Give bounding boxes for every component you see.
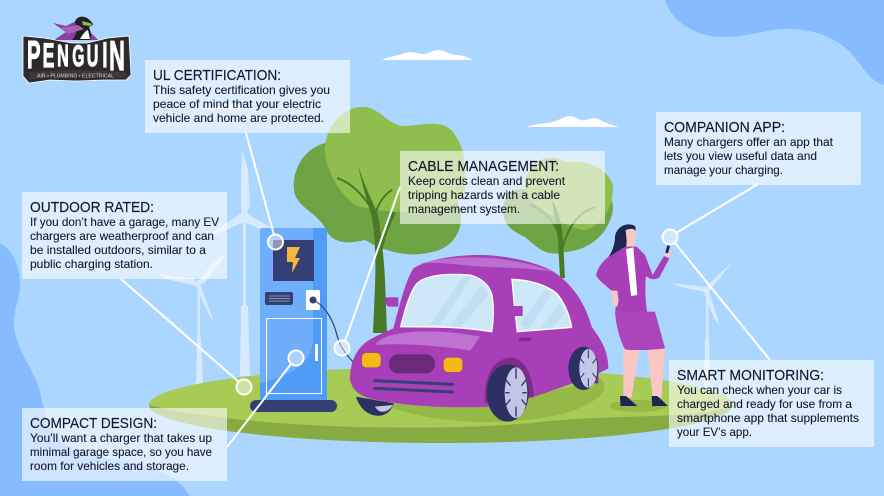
- panel: smart monitoring: smartphone app that supplements: [677, 411, 859, 425]
- panel: smart monitoring: You can check when your car is: [677, 383, 842, 397]
- panel: cable management: tripping hazards with a cable: [408, 188, 560, 202]
- wind turbine: large: [205, 150, 272, 376]
- panel: UL certification: vehicle and home are protected.: [153, 111, 324, 125]
- panel: companion app: lets you view useful data and: [664, 149, 817, 163]
- ground island: [149, 367, 733, 443]
- woman with phone: [596, 224, 672, 407]
- logo: Penguin Air Plumbing Electrical: G: [72, 40, 84, 74]
- charger screen with bolt: [273, 240, 314, 281]
- shoes: [620, 396, 668, 407]
- panel: compact design: You’ll want a charger that takes up: [30, 431, 212, 445]
- panel: cable management: management system.: [408, 202, 520, 216]
- panel: cable management: [400, 151, 605, 224]
- windshield: [401, 274, 493, 332]
- panel: outdoor rated: chargers are weatherproof and can: [30, 229, 214, 243]
- car: [350, 255, 608, 422]
- logo: Penguin Air Plumbing Electrical: [23, 17, 131, 83]
- front wheel: [485, 358, 534, 422]
- tree: small: [503, 157, 613, 278]
- panel: smart monitoring: your EV’s app.: [677, 425, 752, 439]
- panel: cable management: Keep cords clean and prevent: [408, 174, 566, 188]
- panel: outdoor rated: [22, 192, 227, 279]
- panel: smart monitoring: charged and ready for use from a: [677, 397, 852, 411]
- plug socket: [306, 290, 320, 310]
- panel: UL certification: [145, 60, 350, 133]
- logo: Penguin Air Plumbing Electrical: N: [57, 40, 69, 74]
- clouds: [195, 50, 619, 127]
- panel: outdoor rated: public charging station.: [30, 257, 153, 271]
- panel: compact design: COMPACT DESIGN:: [30, 415, 157, 432]
- panel: smart monitoring: [669, 360, 874, 447]
- panel: outdoor rated: be installed outdoors, similar to a: [30, 243, 206, 257]
- panel: compact design: room for vehicles and storage.: [30, 459, 189, 473]
- logo: Penguin Air Plumbing Electrical: N: [109, 34, 125, 80]
- panel: UL certification: peace of mind that your electric: [153, 97, 321, 111]
- panel: UL certification: This safety certification gives you: [153, 83, 330, 97]
- vent: [265, 292, 293, 305]
- panel: companion app: [656, 112, 861, 185]
- background blob: bottom left: [0, 243, 190, 496]
- panel: companion app: Many chargers offer an app that: [664, 135, 834, 149]
- panel: outdoor rated: OUTDOOR RATED:: [30, 199, 154, 216]
- legs: [623, 348, 665, 397]
- panel: companion app: manage your charging.: [664, 163, 783, 177]
- panel: compact design: minimal garage space, so you have: [30, 445, 212, 459]
- rear wheel: [568, 347, 598, 390]
- wind turbine: right: [670, 262, 733, 402]
- jacket: [596, 247, 669, 313]
- tree: large: [294, 107, 465, 333]
- side window: [512, 279, 572, 332]
- charging station: [250, 228, 353, 412]
- connector lines: [121, 133, 770, 447]
- panel: cable management: CABLE MANAGEMENT:: [408, 158, 559, 175]
- logo: Penguin Air Plumbing Electrical: U: [87, 40, 98, 74]
- skirt: [615, 312, 665, 350]
- penguin mascot: [53, 17, 98, 40]
- callout markers: [236, 230, 678, 394]
- panel: smart monitoring: SMART MONITORING:: [677, 367, 824, 384]
- hair: [607, 224, 636, 282]
- panel: UL certification: UL CERTIFICATION:: [153, 67, 281, 84]
- headlights: [362, 353, 381, 368]
- logo: Penguin Air Plumbing Electrical: I: [102, 36, 107, 75]
- phone: [665, 245, 670, 253]
- panel: compact design: [22, 408, 227, 481]
- wind turbine: small left: [157, 252, 227, 386]
- background blob: top right: [665, 0, 884, 85]
- panel: outdoor rated: If you don’t have a garage, many EV: [30, 215, 219, 229]
- panel: companion app: COMPANION APP:: [664, 119, 785, 136]
- logo: Penguin Air Plumbing Electrical: P: [27, 33, 41, 77]
- logo: Penguin Air Plumbing Electrical: E: [43, 36, 54, 75]
- logo: Penguin Air Plumbing Electrical: AIR • PLUMBING • ELECTRICAL: [37, 74, 114, 80]
- grille: [389, 354, 435, 373]
